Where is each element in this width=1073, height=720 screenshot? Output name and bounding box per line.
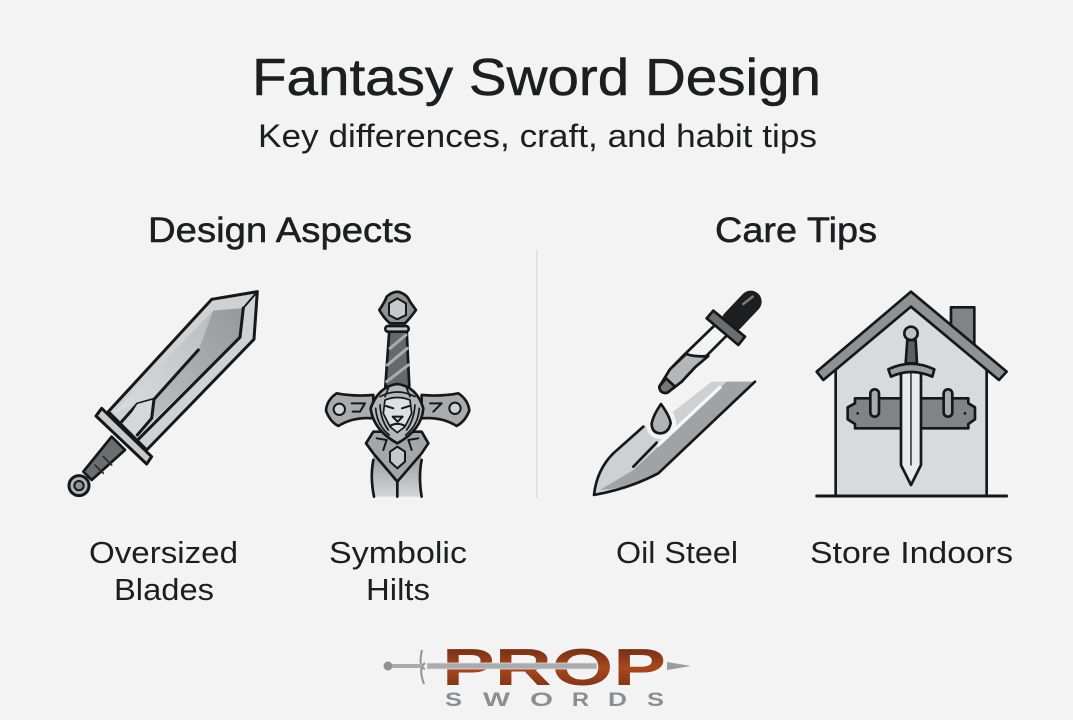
- label: symbolic hilts: [329, 535, 467, 607]
- label: store indoors: Store Indoors: [810, 535, 1013, 570]
- icon: oil drop: [652, 404, 671, 433]
- logo: prop swords: R: [572, 690, 589, 711]
- logo: prop swords: S: [445, 690, 462, 711]
- label: oversized blades: Blades: [114, 572, 214, 607]
- label: symbolic hilts: Hilts: [366, 572, 430, 607]
- label: oversized blades: [89, 535, 238, 607]
- logo: prop swords: D: [608, 690, 627, 711]
- subtitle: Key differences, craft, and habit tips: [258, 118, 817, 154]
- logo: prop swords: [384, 639, 691, 711]
- label: symbolic hilts: Symbolic: [329, 535, 467, 570]
- label: oil steel: Oil Steel: [616, 535, 738, 570]
- heading: design aspects: Design Aspects: [148, 211, 412, 250]
- logo: prop swords: S: [647, 690, 664, 711]
- logo: prop swords: W: [483, 690, 510, 711]
- heading: care tips: Care Tips: [715, 211, 877, 250]
- icon: oil dropper and blade: [594, 297, 755, 495]
- icon: symbolic hilt with lion: [326, 292, 469, 497]
- icon: oversized blade sword: [69, 292, 257, 496]
- label: oversized blades: Oversized: [89, 535, 238, 570]
- logo: prop swords: PROP: [442, 639, 666, 697]
- icon: sword stored in house: [817, 292, 1007, 496]
- logo: prop swords: O: [530, 690, 553, 711]
- title: Fantasy Sword Design: [252, 49, 821, 107]
